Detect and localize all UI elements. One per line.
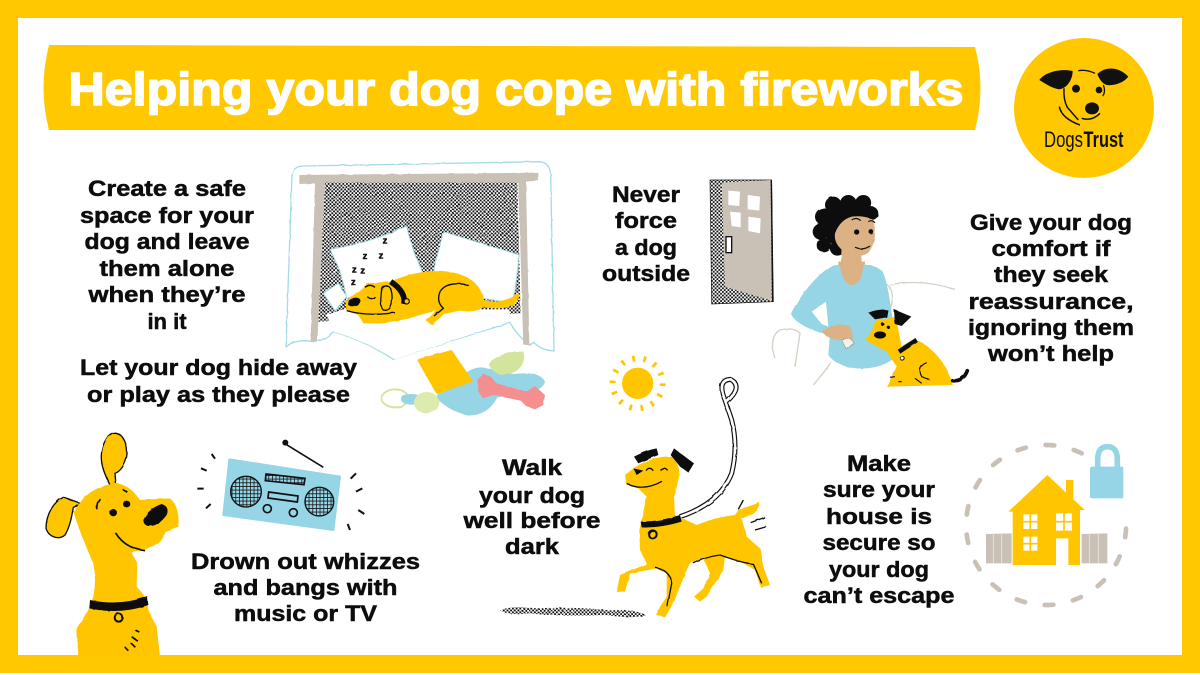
- text: create a safe space: Create a safe: [88, 176, 246, 201]
- text: make sure your house is secure: your dog: [829, 557, 929, 582]
- logo: Dogs Trust: Dogs: [1044, 127, 1083, 152]
- illustration: toys and blanket: [382, 350, 545, 416]
- text: create a safe space: [80, 176, 254, 334]
- text: walk your dog: [462, 455, 600, 559]
- text: walk your dog: dark: [505, 534, 560, 559]
- text: make sure your house is secure: house is: [826, 504, 932, 529]
- text: give your dog comfort: won’t help: [987, 341, 1114, 366]
- sleeping z letters: z: [351, 277, 356, 287]
- logo: Dogs Trust: Trust: [1084, 127, 1124, 152]
- title banner: Helping your dog cope with fireworks: [68, 63, 964, 115]
- text: make sure your house is secure: can’t escape: [804, 583, 954, 608]
- text: give your dog comfort: ignoring them: [968, 315, 1134, 340]
- text: drown out whizzes: and bangs with: [214, 575, 398, 600]
- padlock: [1090, 447, 1123, 498]
- text: walk your dog: your dog: [479, 483, 585, 508]
- text: never force a dog outside: force: [615, 208, 677, 233]
- curly hair: [813, 195, 878, 256]
- sleeping z letters: z: [383, 235, 388, 245]
- title banner: [44, 45, 980, 130]
- illustration: big yellow dog looking up: [46, 433, 179, 657]
- illustration: open door: [710, 180, 773, 304]
- text: create a safe space: them alone: [100, 256, 234, 281]
- text: walk your dog: well before: [462, 508, 600, 533]
- text: give your dog comfort: comfort if: [992, 236, 1111, 261]
- sleeping z letters: z: [352, 264, 357, 274]
- sleeping z letters: z: [360, 265, 365, 275]
- illustration: woman comforting dog: [773, 195, 967, 387]
- text: make sure your house is secure: secure so: [822, 530, 936, 555]
- text: create a safe space: dog and leave: [84, 229, 250, 254]
- text: never force a dog outside: [602, 182, 690, 286]
- sleeping dog: [345, 271, 519, 325]
- text: walk your dog: Walk: [502, 455, 563, 480]
- small dog: [865, 309, 967, 387]
- text: create a safe space: when they’re: [87, 282, 246, 307]
- sleeping z letters: z: [379, 250, 384, 260]
- sleeping z letters: [351, 235, 388, 287]
- text: drown out whizzes: Drown out whizzes: [191, 549, 420, 574]
- illustration: radio: [197, 440, 364, 530]
- illustration: secure house: [966, 445, 1126, 605]
- text: let your dog hide away: Let your dog hide away: [80, 355, 358, 380]
- sleeping z letters: z: [363, 251, 368, 261]
- text: make sure your house is secure: Make: [847, 451, 911, 476]
- text: drown out whizzes: [191, 549, 420, 626]
- text: create a safe space: in it: [147, 309, 187, 334]
- text: let your dog hide away: [80, 355, 358, 407]
- text: give your dog comfort: they seek: [994, 262, 1109, 287]
- text: never force a dog outside: Never: [612, 182, 680, 207]
- illustration: sun: [613, 358, 663, 408]
- illustration: dog sleeping in covered den: [286, 162, 554, 359]
- text: give your dog comfort: [968, 210, 1134, 366]
- logo: Dogs Trust: [1014, 38, 1154, 178]
- text: give your dog comfort: Give your dog: [970, 210, 1132, 235]
- illustration: walking dog with lead: [500, 379, 770, 617]
- text: never force a dog outside: a dog: [615, 235, 677, 260]
- text: make sure your house is secure: [804, 451, 954, 608]
- text: never force a dog outside: outside: [602, 261, 690, 286]
- text: create a safe space: space for your: [80, 203, 254, 228]
- text: make sure your house is secure: sure your: [823, 477, 935, 502]
- text: let your dog hide away: or play as they please: [87, 382, 350, 407]
- text: drown out whizzes: music or TV: [234, 601, 377, 626]
- text: give your dog comfort: reassurance,: [968, 289, 1134, 314]
